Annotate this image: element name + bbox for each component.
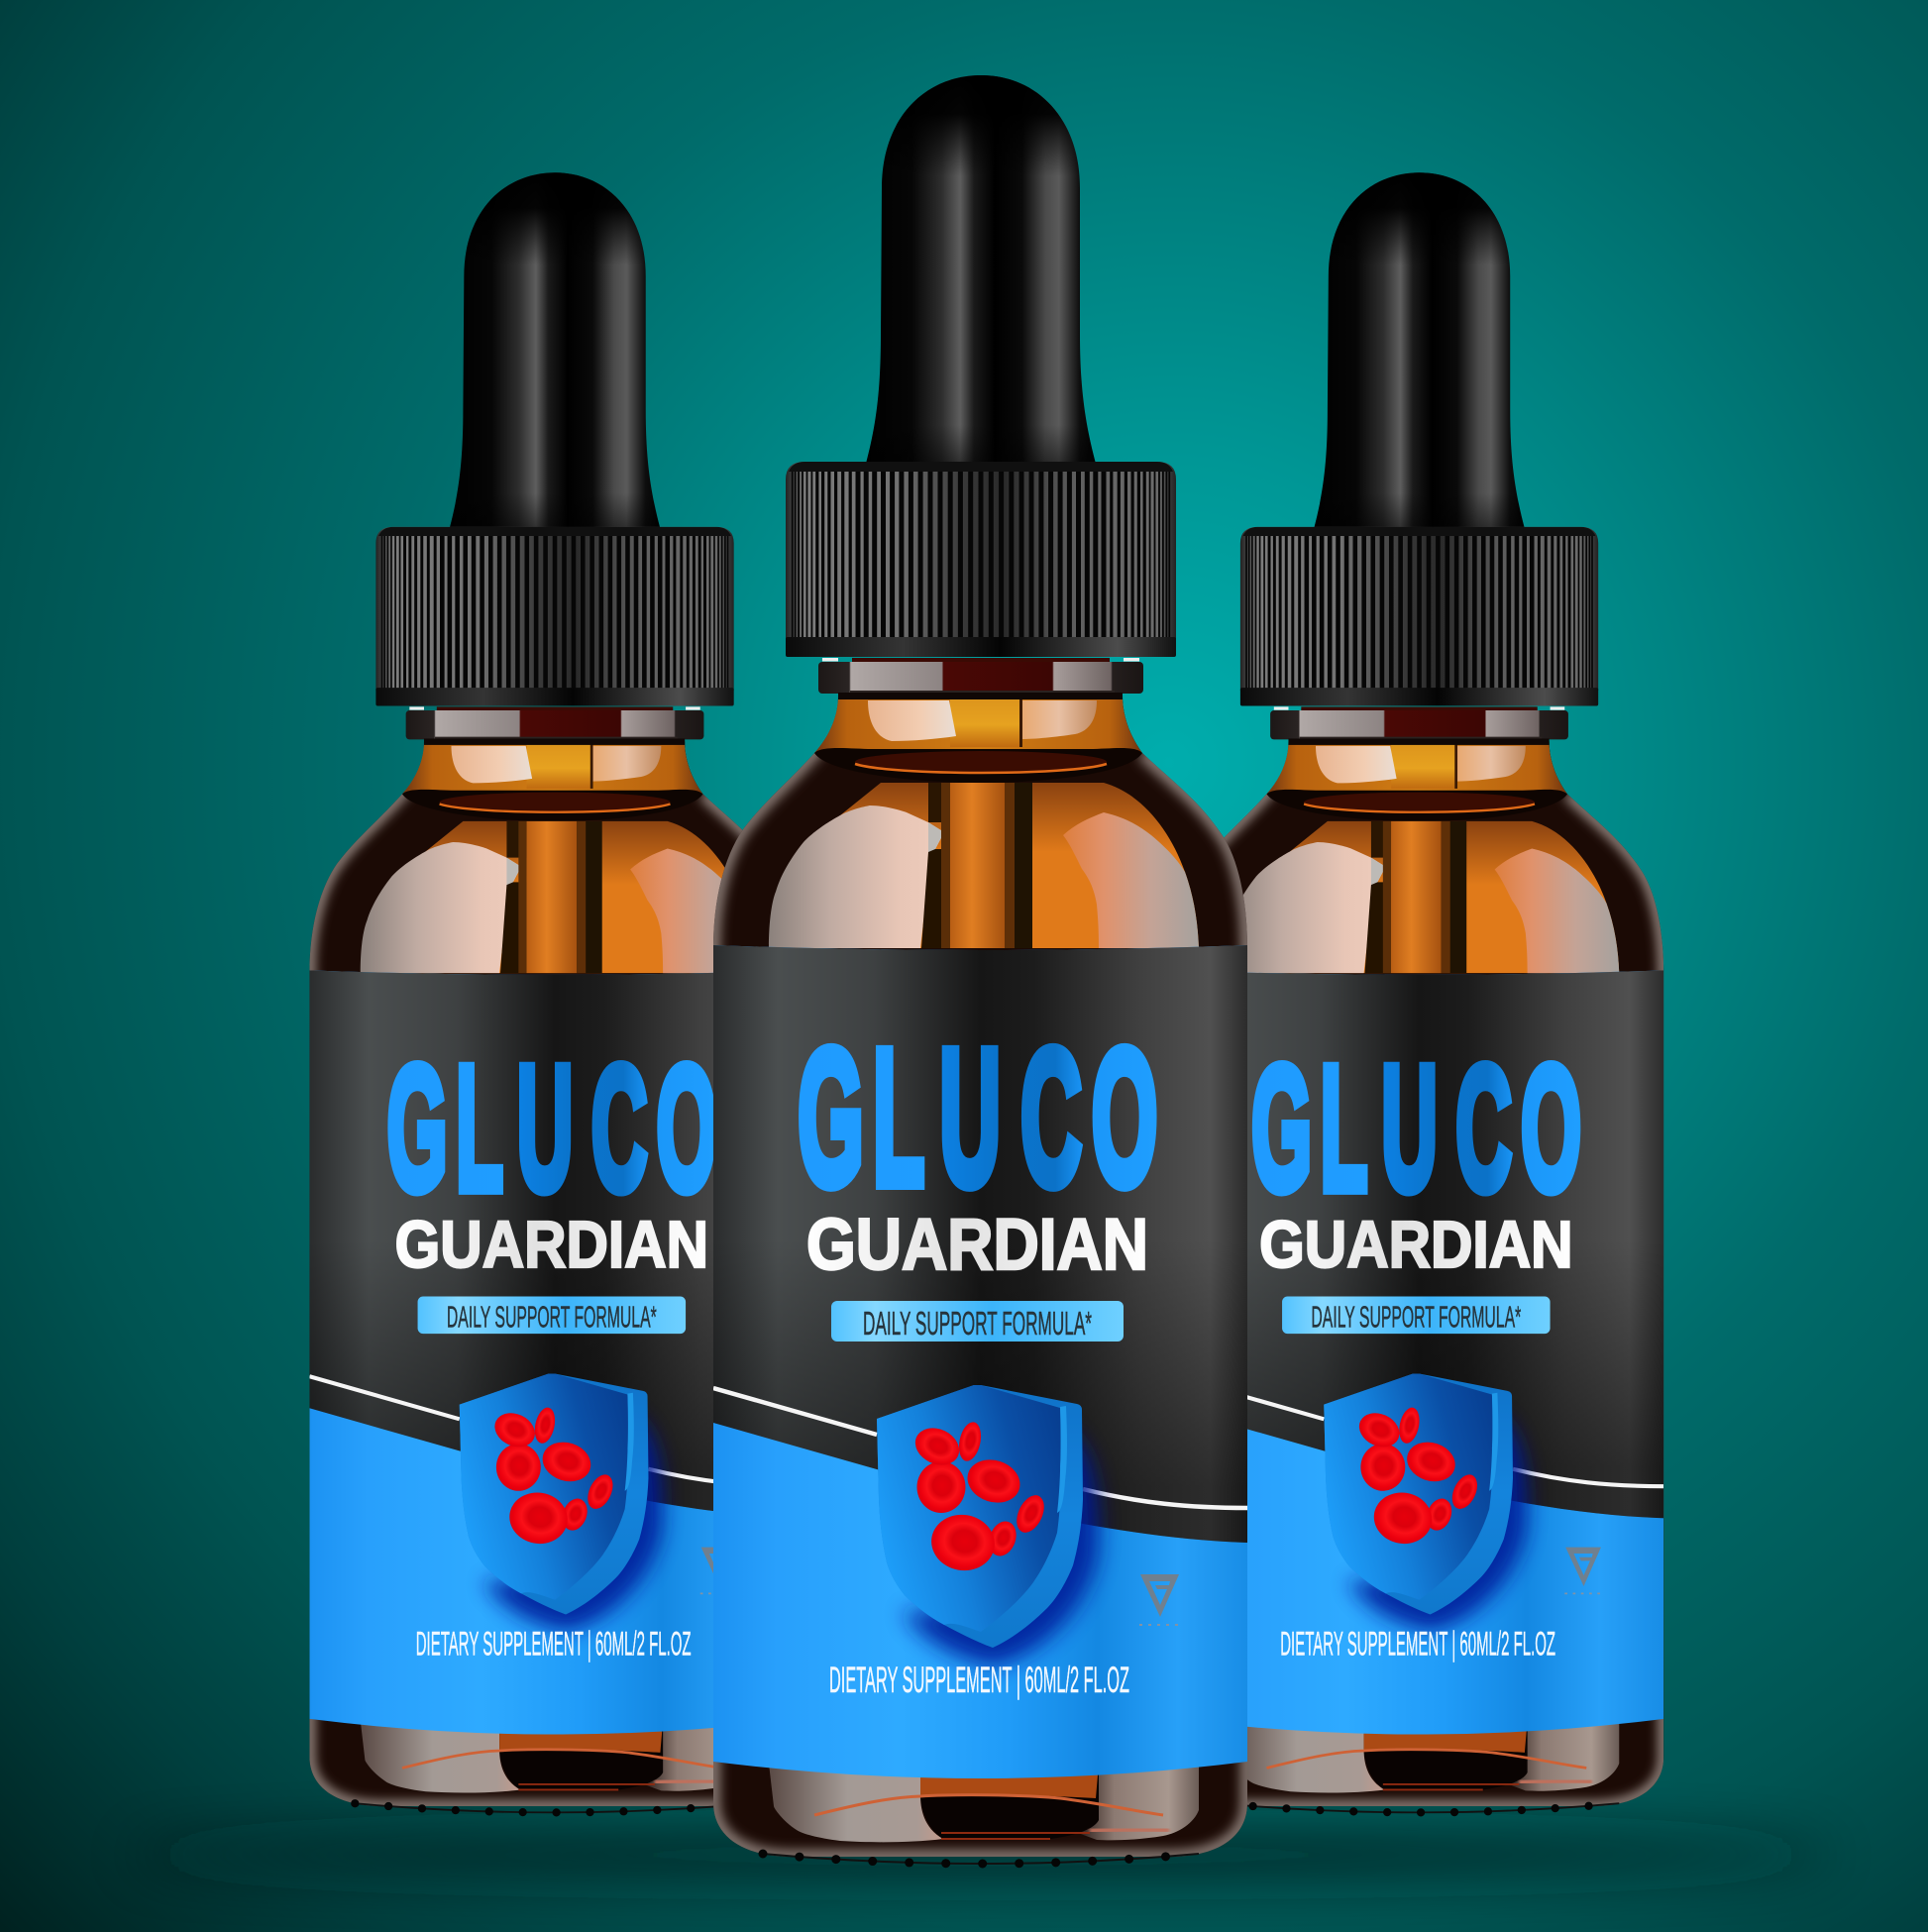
amber glass body <box>713 696 1247 1864</box>
center bottle <box>713 75 1247 1864</box>
brand name: GUARDIAN <box>806 1205 1148 1285</box>
left bottle: DIETARY SUPPLEMENT | 60ML/2 FL.OZ <box>416 1626 692 1664</box>
tagline pill <box>418 1297 686 1335</box>
brand name: GLUCO <box>1251 1030 1581 1228</box>
right bottle <box>1174 172 1663 1812</box>
label background <box>309 967 800 1748</box>
tagline pill: DAILY SUPPORT FORMULA* <box>1311 1302 1521 1335</box>
shield <box>460 1373 663 1632</box>
dropper bulb <box>450 172 660 529</box>
right bottle: DIETARY SUPPLEMENT | 60ML/2 FL.OZ <box>1280 1626 1555 1664</box>
amber glass body <box>309 741 800 1812</box>
label background <box>1174 967 1663 1748</box>
neck ring <box>1270 706 1568 745</box>
tagline pill <box>831 1301 1124 1342</box>
left bottle <box>309 172 800 1812</box>
center bottle: DIETARY SUPPLEMENT | 60ML/2 FL.OZ <box>829 1660 1129 1700</box>
shield <box>1324 1373 1527 1632</box>
brand mark <box>700 1548 738 1593</box>
red blood cells <box>1353 1406 1482 1549</box>
dropper bulb <box>1314 172 1525 529</box>
red blood cells <box>489 1406 618 1549</box>
brand mark <box>1139 1574 1181 1625</box>
brand name: GLUCO <box>798 1010 1157 1225</box>
neck ring <box>406 706 703 745</box>
label background <box>713 941 1247 1793</box>
dropper bulb <box>866 75 1096 464</box>
neck ring <box>818 658 1143 699</box>
brand mark <box>1564 1548 1603 1593</box>
brand name: GUARDIAN <box>395 1208 708 1282</box>
tagline pill: DAILY SUPPORT FORMULA* <box>863 1305 1092 1342</box>
amber glass body <box>1174 741 1663 1812</box>
ribbed cap <box>786 462 1176 657</box>
tagline pill: DAILY SUPPORT FORMULA* <box>447 1302 657 1335</box>
brand name: GLUCO <box>387 1030 717 1228</box>
ribbed cap <box>375 527 734 705</box>
brand name: GUARDIAN <box>1259 1208 1573 1282</box>
ribbed cap <box>1240 527 1598 705</box>
shield <box>877 1385 1099 1666</box>
tagline pill <box>1282 1297 1551 1335</box>
red blood cells <box>910 1420 1049 1575</box>
